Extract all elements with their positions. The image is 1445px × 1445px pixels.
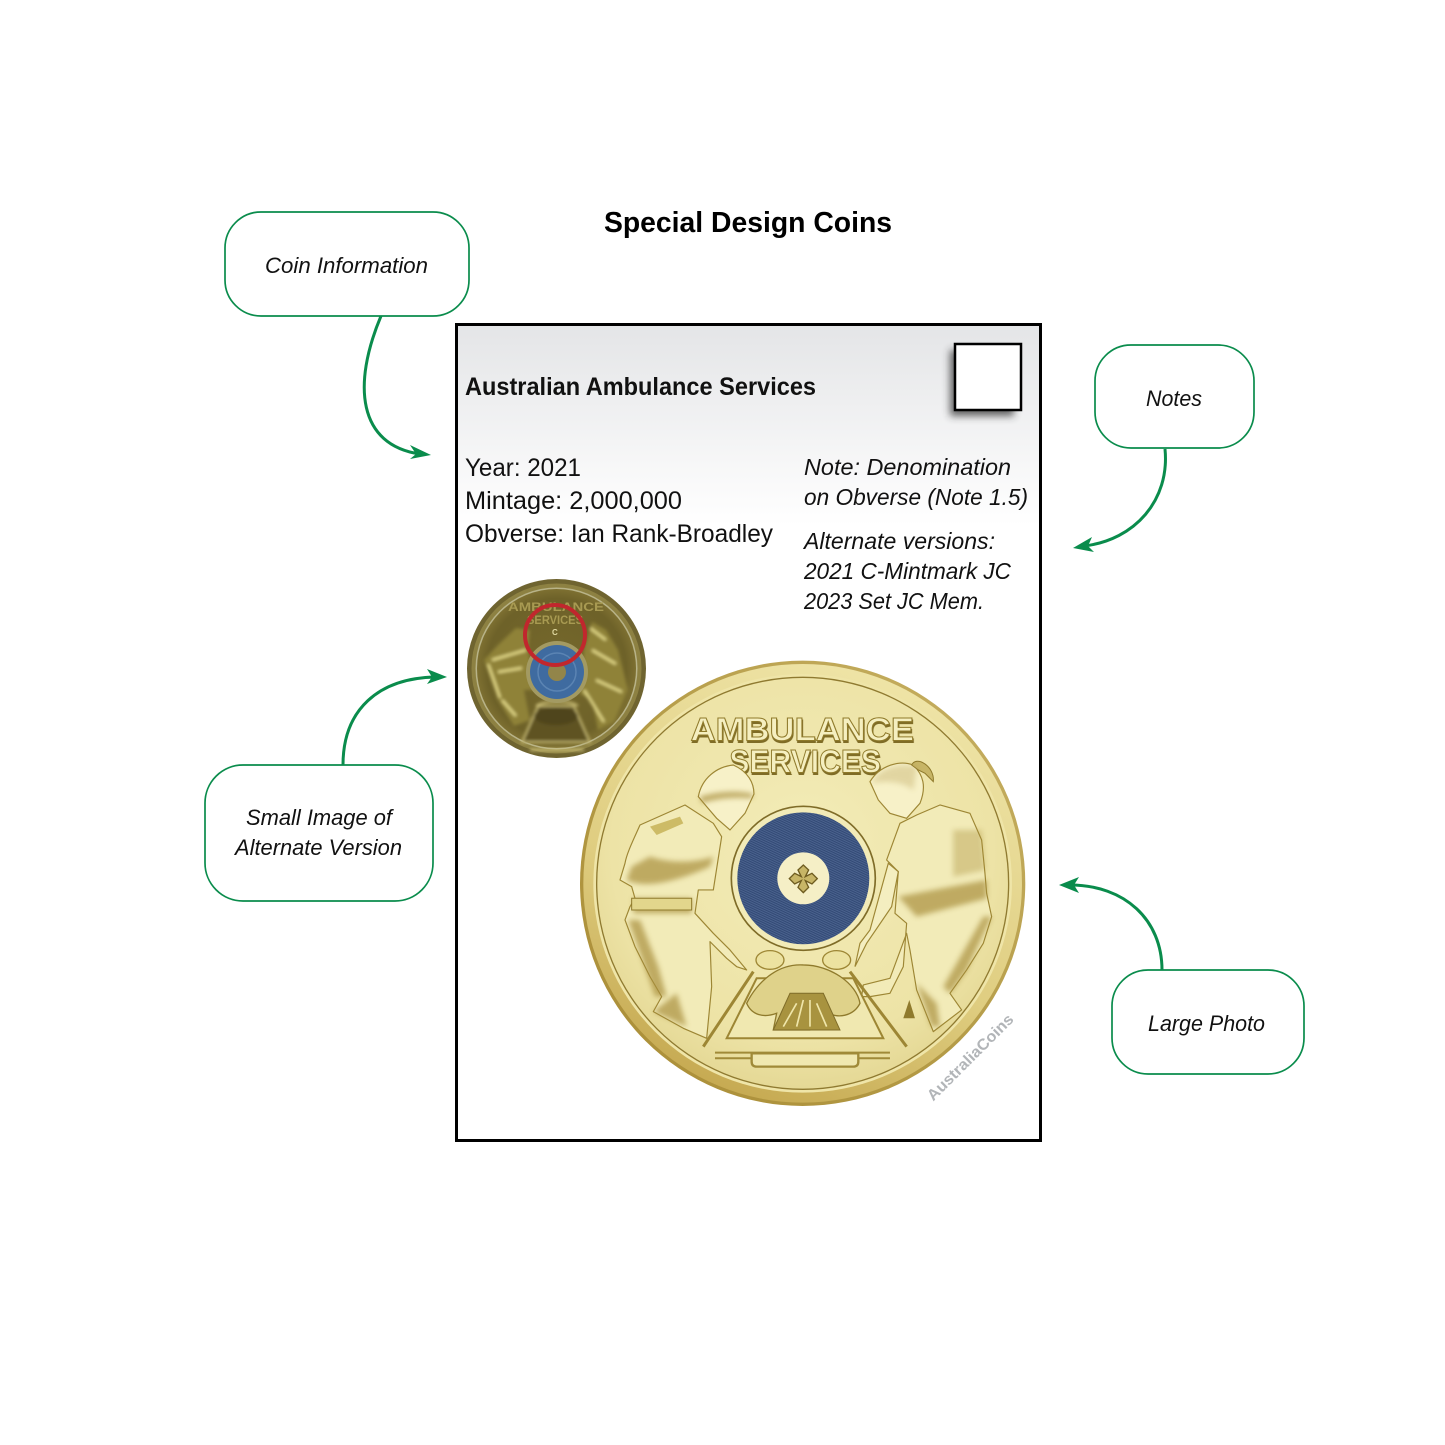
text block: coin information: Obverse: Ian Rank-Broadley: [465, 520, 773, 548]
small coin inscription: AMBULANCE: [508, 600, 604, 614]
text block: notes: Note: Denomination: [804, 454, 1011, 480]
arrow: large photo: [1059, 877, 1162, 970]
small coin blue disc: [526, 641, 588, 703]
head: [870, 763, 923, 818]
coin rim: [580, 661, 1025, 1106]
small coin inscription: C: [552, 628, 558, 637]
red highlight circle: [525, 605, 585, 665]
title: Special Design Coins: [604, 207, 892, 239]
text block: coin information: [465, 454, 773, 548]
callout: coin information: [225, 212, 469, 316]
right paramedic: [855, 761, 992, 1032]
text block: notes: on Obverse (Note 1.5): [804, 484, 1028, 510]
mint mark: [903, 1000, 915, 1018]
arrow: small image: [343, 669, 447, 765]
stretcher and patient: [703, 951, 907, 1067]
head: [698, 765, 754, 830]
text block: notes: Alternate versions:: [802, 528, 995, 554]
left paramedic: [620, 765, 754, 1038]
callout: small image of alternate version: Small Image of: [246, 805, 395, 830]
small coin figures: [484, 622, 628, 750]
watermark: AustraliaCoins: [924, 1011, 1018, 1104]
small coin inscription: [508, 600, 604, 637]
arrow: notes: [1073, 449, 1165, 552]
blue centre disc: [731, 806, 875, 950]
panel: coin card: [456, 324, 1040, 1140]
small coin inscription: SERVICES: [527, 613, 583, 627]
arm: [855, 863, 898, 967]
callout: small image of alternate version: [205, 765, 433, 901]
heading: coin name: Australian Ambulance Services: [465, 373, 816, 401]
callout: notes: Notes: [1146, 386, 1202, 411]
coin legend: AMBULANCE: [691, 711, 914, 748]
text block: coin information: Mintage: 2,000,000: [465, 487, 682, 515]
small coin image: alternate version: [467, 579, 646, 758]
coin legend: SERVICES: [729, 743, 881, 780]
callout: large photo: Large Photo: [1148, 1011, 1265, 1036]
Maltese cross: [789, 865, 817, 893]
callout: large photo: [1112, 970, 1304, 1074]
callout: coin information: Coin Information: [265, 253, 428, 278]
coin legend: [691, 711, 914, 780]
checkbox: [950, 344, 1021, 416]
text block: notes: 2023 Set JC Mem.: [803, 588, 984, 614]
arrow: coin information: [364, 316, 431, 459]
callout: small image of alternate version: Alternate Version: [233, 835, 402, 860]
callout: notes: [1095, 345, 1254, 448]
text block: coin information: Year: 2021: [465, 454, 581, 482]
text block: notes: [802, 454, 1028, 614]
text block: notes: 2021 C-Mintmark JC: [803, 558, 1012, 584]
large coin photo: [580, 661, 1025, 1106]
